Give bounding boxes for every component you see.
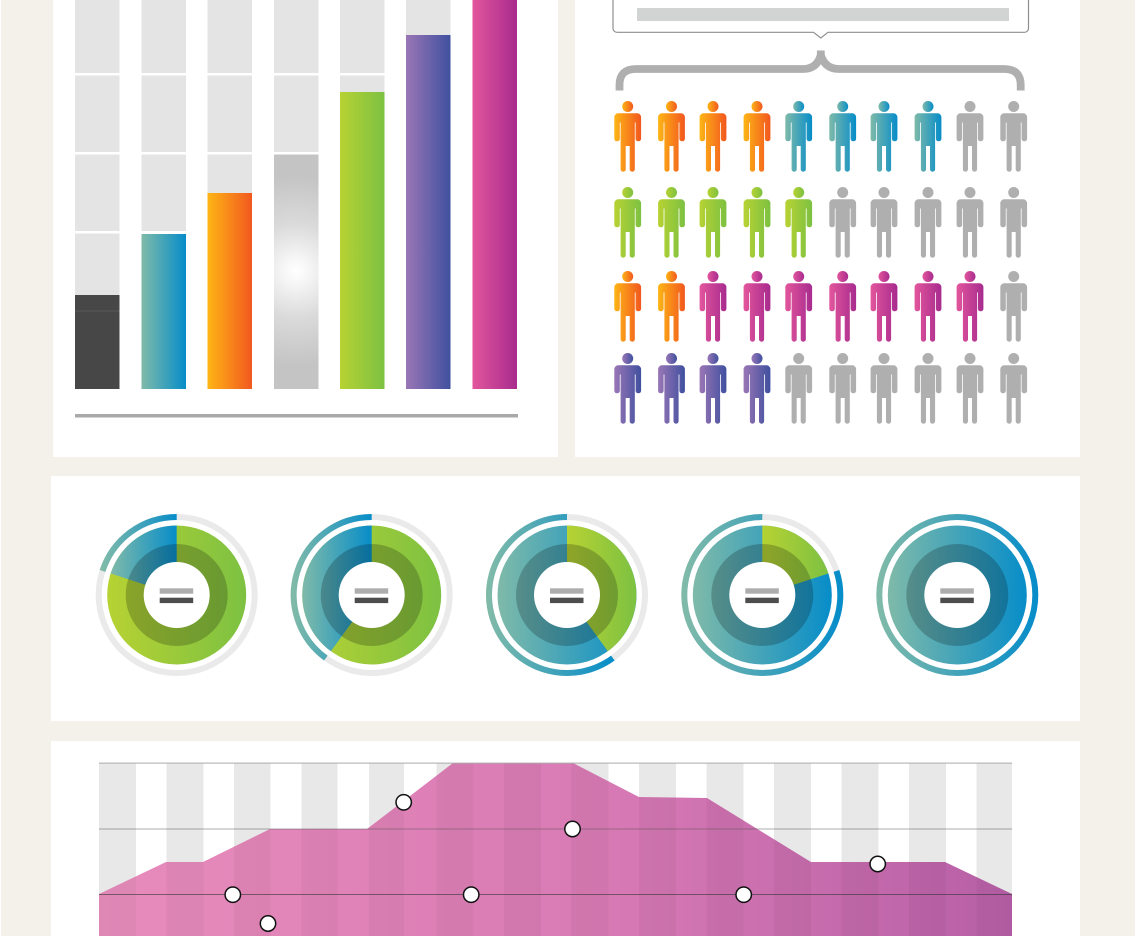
area chart background stripes bbox=[99, 763, 1012, 936]
speech box bbox=[613, 0, 1029, 38]
bar chart baseline bbox=[75, 414, 518, 418]
chart grid lines bbox=[99, 763, 1012, 895]
curly brace bbox=[620, 50, 1021, 90]
bar 6: purple bbox=[406, 0, 450, 389]
panel: donut charts bbox=[51, 476, 1080, 721]
donut 3: 60 percent blue bbox=[489, 517, 645, 673]
bar 4: silver bbox=[274, 0, 318, 389]
donut 4: 80 percent blue bbox=[684, 517, 840, 673]
area stripes overlay bbox=[99, 838, 253, 936]
people row 4 bbox=[614, 353, 1027, 424]
people row 3 bbox=[614, 271, 1027, 342]
speech box text placeholder bbox=[637, 8, 1009, 21]
bar 3: orange bbox=[208, 0, 252, 389]
pink area bbox=[99, 763, 1012, 936]
bar 2: teal bbox=[142, 0, 186, 389]
donut 1: 20 percent blue bbox=[99, 517, 255, 673]
bar 7: magenta bbox=[472, 0, 517, 389]
people row 1 bbox=[614, 101, 1027, 172]
people row 2 bbox=[614, 187, 1027, 258]
data points bbox=[225, 795, 885, 931]
bar 1: dark bbox=[75, 0, 120, 389]
panel: bar chart bbox=[53, 0, 558, 457]
panel: area chart bbox=[51, 741, 1080, 936]
donut 2: 40 percent blue bbox=[294, 517, 450, 673]
donut 5: 100 percent blue bbox=[879, 517, 1035, 673]
panel: people pictogram bbox=[575, 0, 1080, 457]
bar 5: green bbox=[340, 0, 384, 389]
